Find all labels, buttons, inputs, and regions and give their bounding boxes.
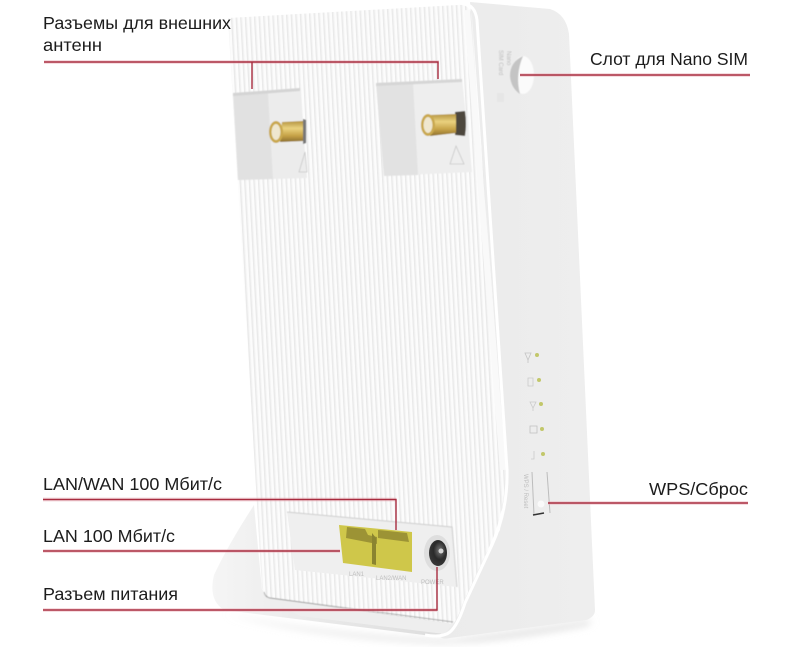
warning mark [450, 146, 464, 164]
SIM slot [497, 50, 534, 102]
callout: WPS reset: WPS/Сброс [649, 479, 748, 499]
gold connector [421, 111, 466, 136]
callout: power: Разъем питания [43, 584, 178, 604]
white edge highlight [425, 4, 507, 636]
left antenna connector [233, 88, 307, 180]
callout: antenna sockets [43, 13, 439, 89]
ethernet and power ports [287, 512, 457, 587]
warning mark [299, 152, 307, 172]
ethernet and power ports: POWER [421, 580, 444, 586]
SIM slot: Nano [505, 51, 511, 66]
callout: LAN/WAN: LAN/WAN 100 Мбит/с [43, 474, 222, 494]
LAN ports [339, 525, 412, 572]
right antenna connector [376, 79, 472, 176]
status indicators [525, 353, 545, 459]
power jack [424, 535, 450, 571]
SIM slot: SIM Card [497, 50, 503, 75]
callout: SIM slot: Слот для Nano SIM [590, 49, 748, 69]
ethernet and power ports: LAN2/WAN [376, 576, 406, 582]
callout: LAN/WAN [43, 474, 396, 530]
gold connector [269, 119, 306, 144]
callout: antenna sockets: антенн [43, 35, 102, 55]
WPS reset button [522, 472, 550, 515]
WPS reset button: WPS / Reset [522, 474, 528, 509]
callout: LAN: LAN 100 Мбит/с [43, 526, 175, 546]
port captions: LAN1 [349, 572, 365, 578]
callout: antenna sockets: Разъемы для внешних [43, 13, 231, 33]
stand [212, 505, 470, 637]
side panel [440, 2, 595, 639]
router body [212, 2, 595, 639]
callout: power [43, 567, 437, 610]
back panel with ribs [228, 5, 505, 634]
ground shadow [225, 614, 592, 643]
